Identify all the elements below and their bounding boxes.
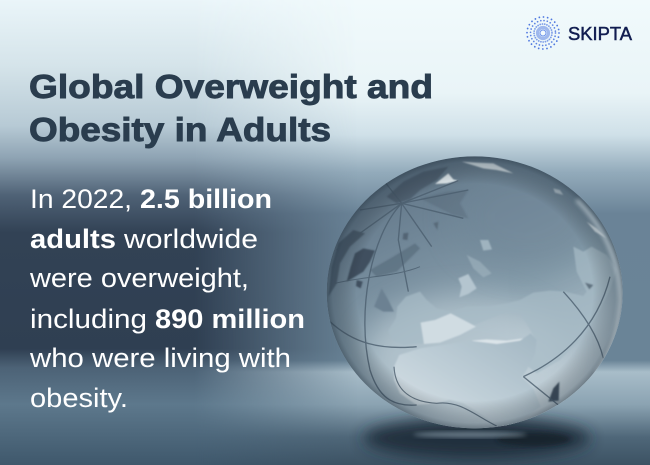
lit core glow <box>363 297 563 410</box>
body statistic text: who were living with <box>29 343 291 373</box>
body statistic text: 890 million <box>155 304 305 334</box>
logo mark: radial dots <box>527 17 559 49</box>
rim shading <box>327 156 623 428</box>
body statistic text: obesity. <box>30 383 128 413</box>
title: Global Overweight and <box>29 68 433 105</box>
body statistic text <box>29 184 305 413</box>
title: Obesity in Adults <box>29 111 331 148</box>
glass sphere <box>327 156 623 428</box>
dark land, upper left <box>328 167 593 402</box>
body statistic text: including <box>30 304 147 334</box>
logo wordmark: SKIPTA <box>568 23 633 44</box>
body statistic text: adults <box>30 224 116 254</box>
globe shadow <box>363 418 590 459</box>
body statistic text: worldwide <box>123 224 258 254</box>
title <box>29 68 433 148</box>
rim highlight <box>577 200 621 373</box>
body statistic text: were overweight, <box>29 263 249 293</box>
continents: Eurasia band <box>388 162 617 426</box>
globe on table <box>327 156 623 459</box>
logo: SKIPTA <box>527 17 633 49</box>
body statistic text: 2.5 billion <box>140 184 272 214</box>
graticule lines <box>330 180 610 426</box>
body statistic text: In 2022, <box>30 184 132 214</box>
